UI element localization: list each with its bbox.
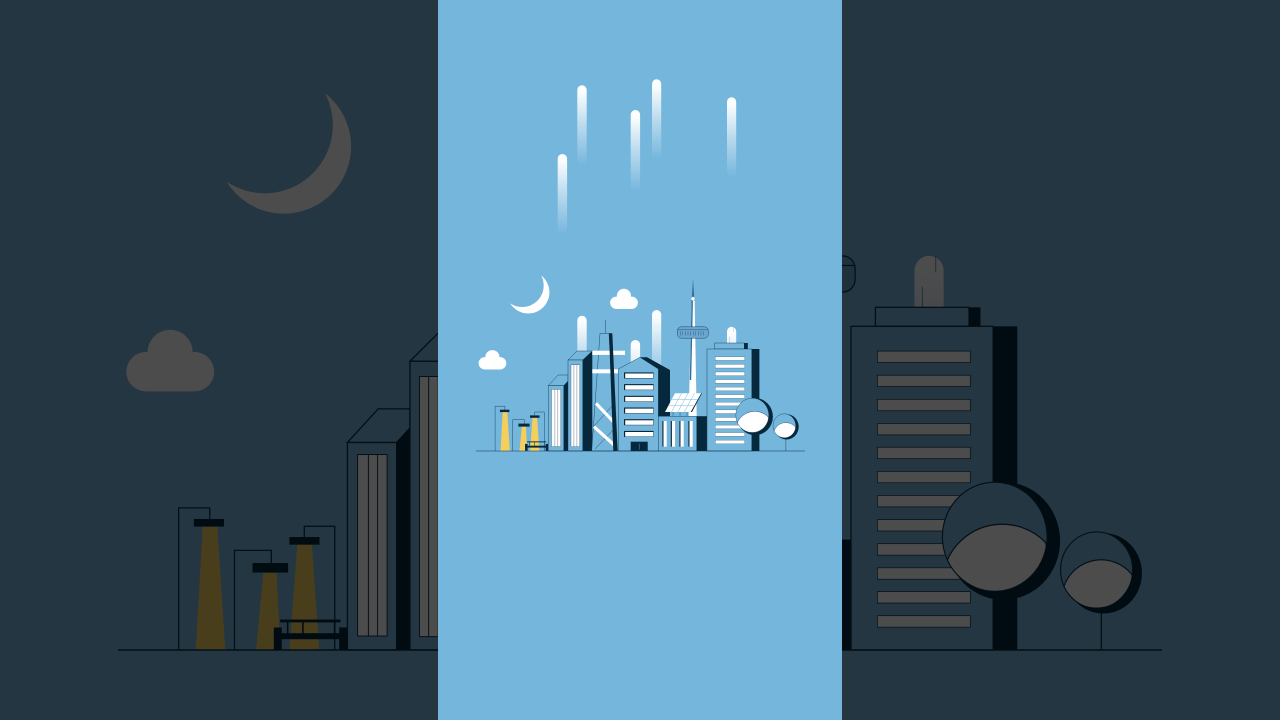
park bench (525, 441, 548, 451)
building: pitched-roof block (618, 357, 670, 451)
cloud left (479, 350, 506, 370)
cloud top (610, 289, 638, 309)
construction tower (592, 320, 625, 451)
falling light streaks (558, 79, 736, 420)
door (631, 442, 648, 451)
crescent moon (510, 276, 549, 313)
TV tower (677, 278, 708, 417)
windows (624, 372, 654, 437)
tree: large (732, 398, 773, 445)
city illustration (476, 79, 805, 451)
ground line (476, 450, 805, 452)
low block windows (662, 421, 693, 447)
centre panel: sky blue (438, 0, 842, 720)
building: short tower with striped window (548, 375, 568, 451)
building: right tower with strip windows (707, 327, 759, 451)
street lamps (495, 406, 544, 451)
strip windows (715, 357, 745, 444)
tree: small (771, 414, 799, 451)
building: low block with solar panel (658, 393, 707, 451)
building: tall tower with striped window (568, 351, 592, 451)
solar panel (665, 393, 702, 416)
